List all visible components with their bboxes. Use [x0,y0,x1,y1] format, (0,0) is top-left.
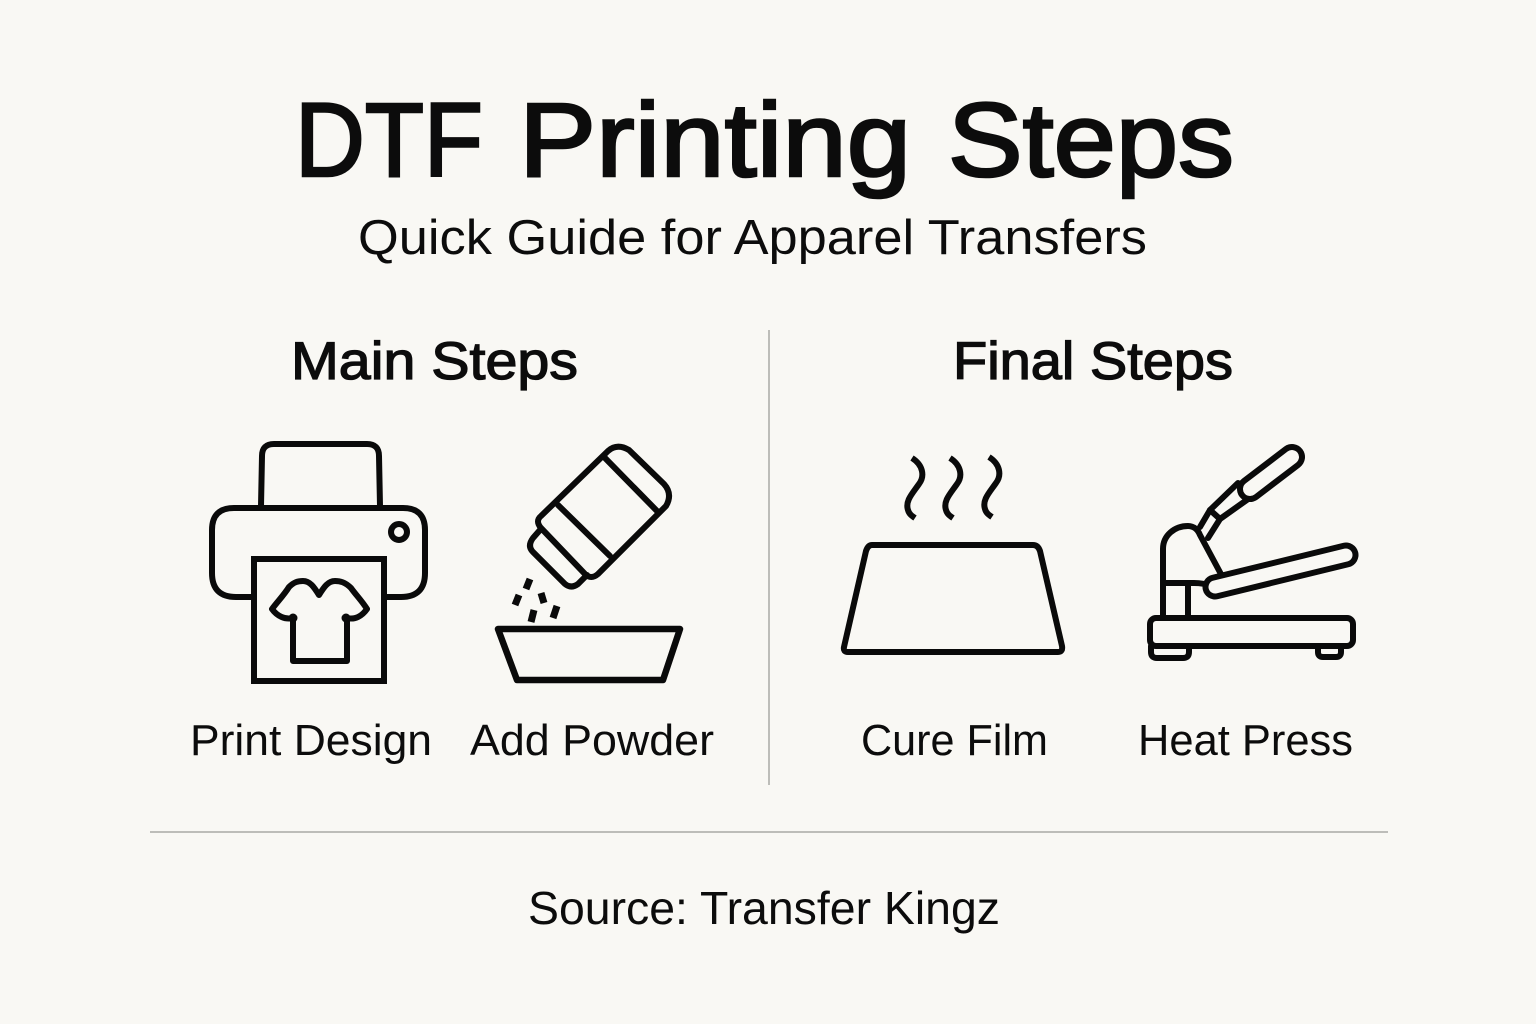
label: Heat Press: Heat Press [1138,716,1353,765]
title: DTF [295,82,483,199]
title: Steps [948,82,1234,199]
icon: heat press machine [1150,457,1353,658]
title [295,82,1234,199]
press arm [1215,457,1346,587]
label: Add Powder: Add Powder [470,716,714,765]
icon: curing film with steam [844,457,1062,652]
label: Print Design: Print Design [190,716,432,765]
icon: powder bottle and tray [498,447,680,680]
label: Cure Film: Cure Film [861,716,1048,765]
subtitle: Quick Guide for Apparel Transfers [358,211,1147,265]
source note: Source: Transfer Kingz [528,882,1000,934]
heading: Main Steps: Main Steps [291,332,578,391]
icon: printer with shirt [212,444,425,681]
heading: Final Steps: Final Steps [953,332,1233,391]
title: Printing [519,82,911,199]
